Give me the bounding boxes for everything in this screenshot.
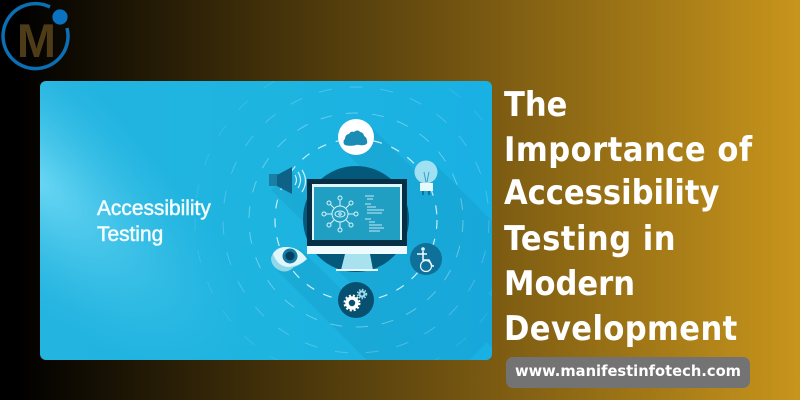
title: Testing in	[504, 219, 676, 259]
icon: gears	[338, 282, 374, 318]
title	[504, 85, 753, 349]
icon: eye	[271, 247, 307, 272]
icon: speaker	[269, 167, 306, 194]
website badge	[506, 357, 750, 388]
title: Development	[504, 309, 738, 349]
panel label: Testing	[97, 223, 163, 246]
code lines	[365, 196, 384, 231]
icon: brain	[338, 119, 374, 155]
icon: wheelchair	[410, 243, 442, 275]
title: The	[504, 85, 567, 125]
icon: light bulb	[414, 160, 438, 195]
icon: monitor	[303, 166, 409, 272]
panel: accessibility testing illustration	[40, 81, 492, 360]
logo: M	[17, 14, 56, 67]
title: Accessibility	[504, 173, 719, 213]
title: Importance of	[504, 130, 753, 170]
title: Modern	[504, 264, 635, 304]
icon: eye network	[322, 196, 358, 232]
logo	[1, 2, 70, 70]
panel label: Accessibility	[97, 197, 211, 220]
website badge: www.manifestinfotech.com	[515, 363, 741, 380]
